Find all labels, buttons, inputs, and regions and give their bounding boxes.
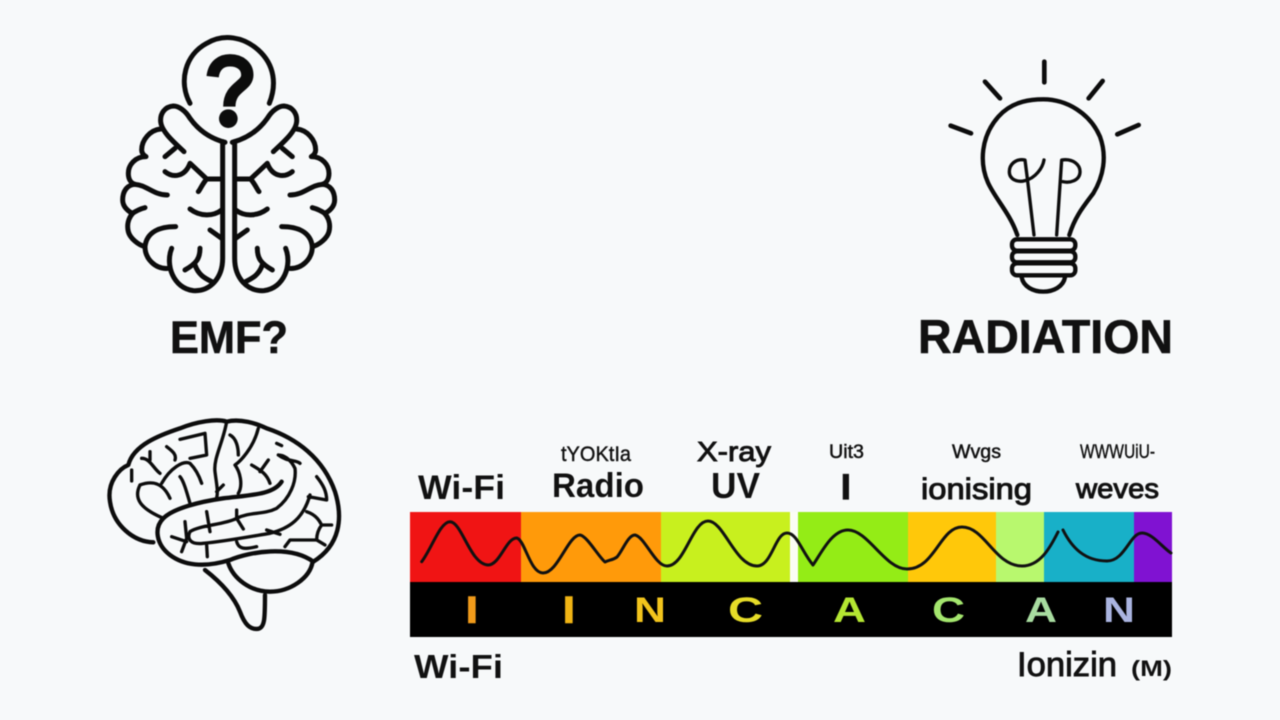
icon: bulb base [1012,239,1075,292]
icon: folds [132,422,332,557]
label: Ionizin (M): Ionizin [1017,646,1117,684]
label: Ionizin (M): (M) [1131,656,1172,681]
band letters: A [1025,591,1057,630]
label: Ionizin (M) [1017,646,1172,684]
heading: EMF?: EMF? [170,312,288,363]
icon: light bulb [951,62,1139,292]
label: Wi-Fi: Wi-Fi [418,469,505,507]
icon: right hemisphere [232,106,335,291]
icon: brain with question mark [123,38,335,291]
band letters: A [833,591,866,630]
band letters [467,591,1135,630]
heading: RADIATION: RADIATION [918,310,1173,363]
black band [410,582,1172,637]
label: UV: UV [711,465,760,506]
label: small garbled: WWWUiU- [1080,442,1155,463]
band letters: C [932,591,965,630]
icon: bulb glass [983,99,1104,235]
band letters: N [1103,591,1135,630]
colour bands [410,512,1172,582]
label: Wi-Fi bottom: Wi-Fi [414,648,503,685]
label: small garbled: Wvgs [952,442,1001,463]
band letters: N [634,591,666,630]
icon: question bubble [184,38,273,128]
label: Radio: Radio [552,467,644,505]
icon: cerebellum and stem [205,562,313,629]
band letters: C [728,591,763,630]
label: X-ray: X-ray [697,436,771,467]
label: I: I [841,468,851,507]
top spectrum labels [418,436,1159,507]
band letters: I [564,591,574,630]
wave line [422,521,1171,573]
icon: temporal lobe [158,482,313,565]
label: small garbled: tYOKtIa [561,443,631,466]
icon: filament [1009,160,1080,235]
label: weves: weves [1075,473,1159,504]
icon: side view brain [109,420,339,629]
label: ionising: ionising [921,473,1032,506]
spectrum bar [410,512,1172,637]
icon: light rays [951,62,1139,134]
icon: left hemisphere [123,106,225,291]
label: small garbled: Uit3 [829,442,864,463]
band letters: I [467,591,477,630]
icon: cerebrum outline [109,420,339,562]
